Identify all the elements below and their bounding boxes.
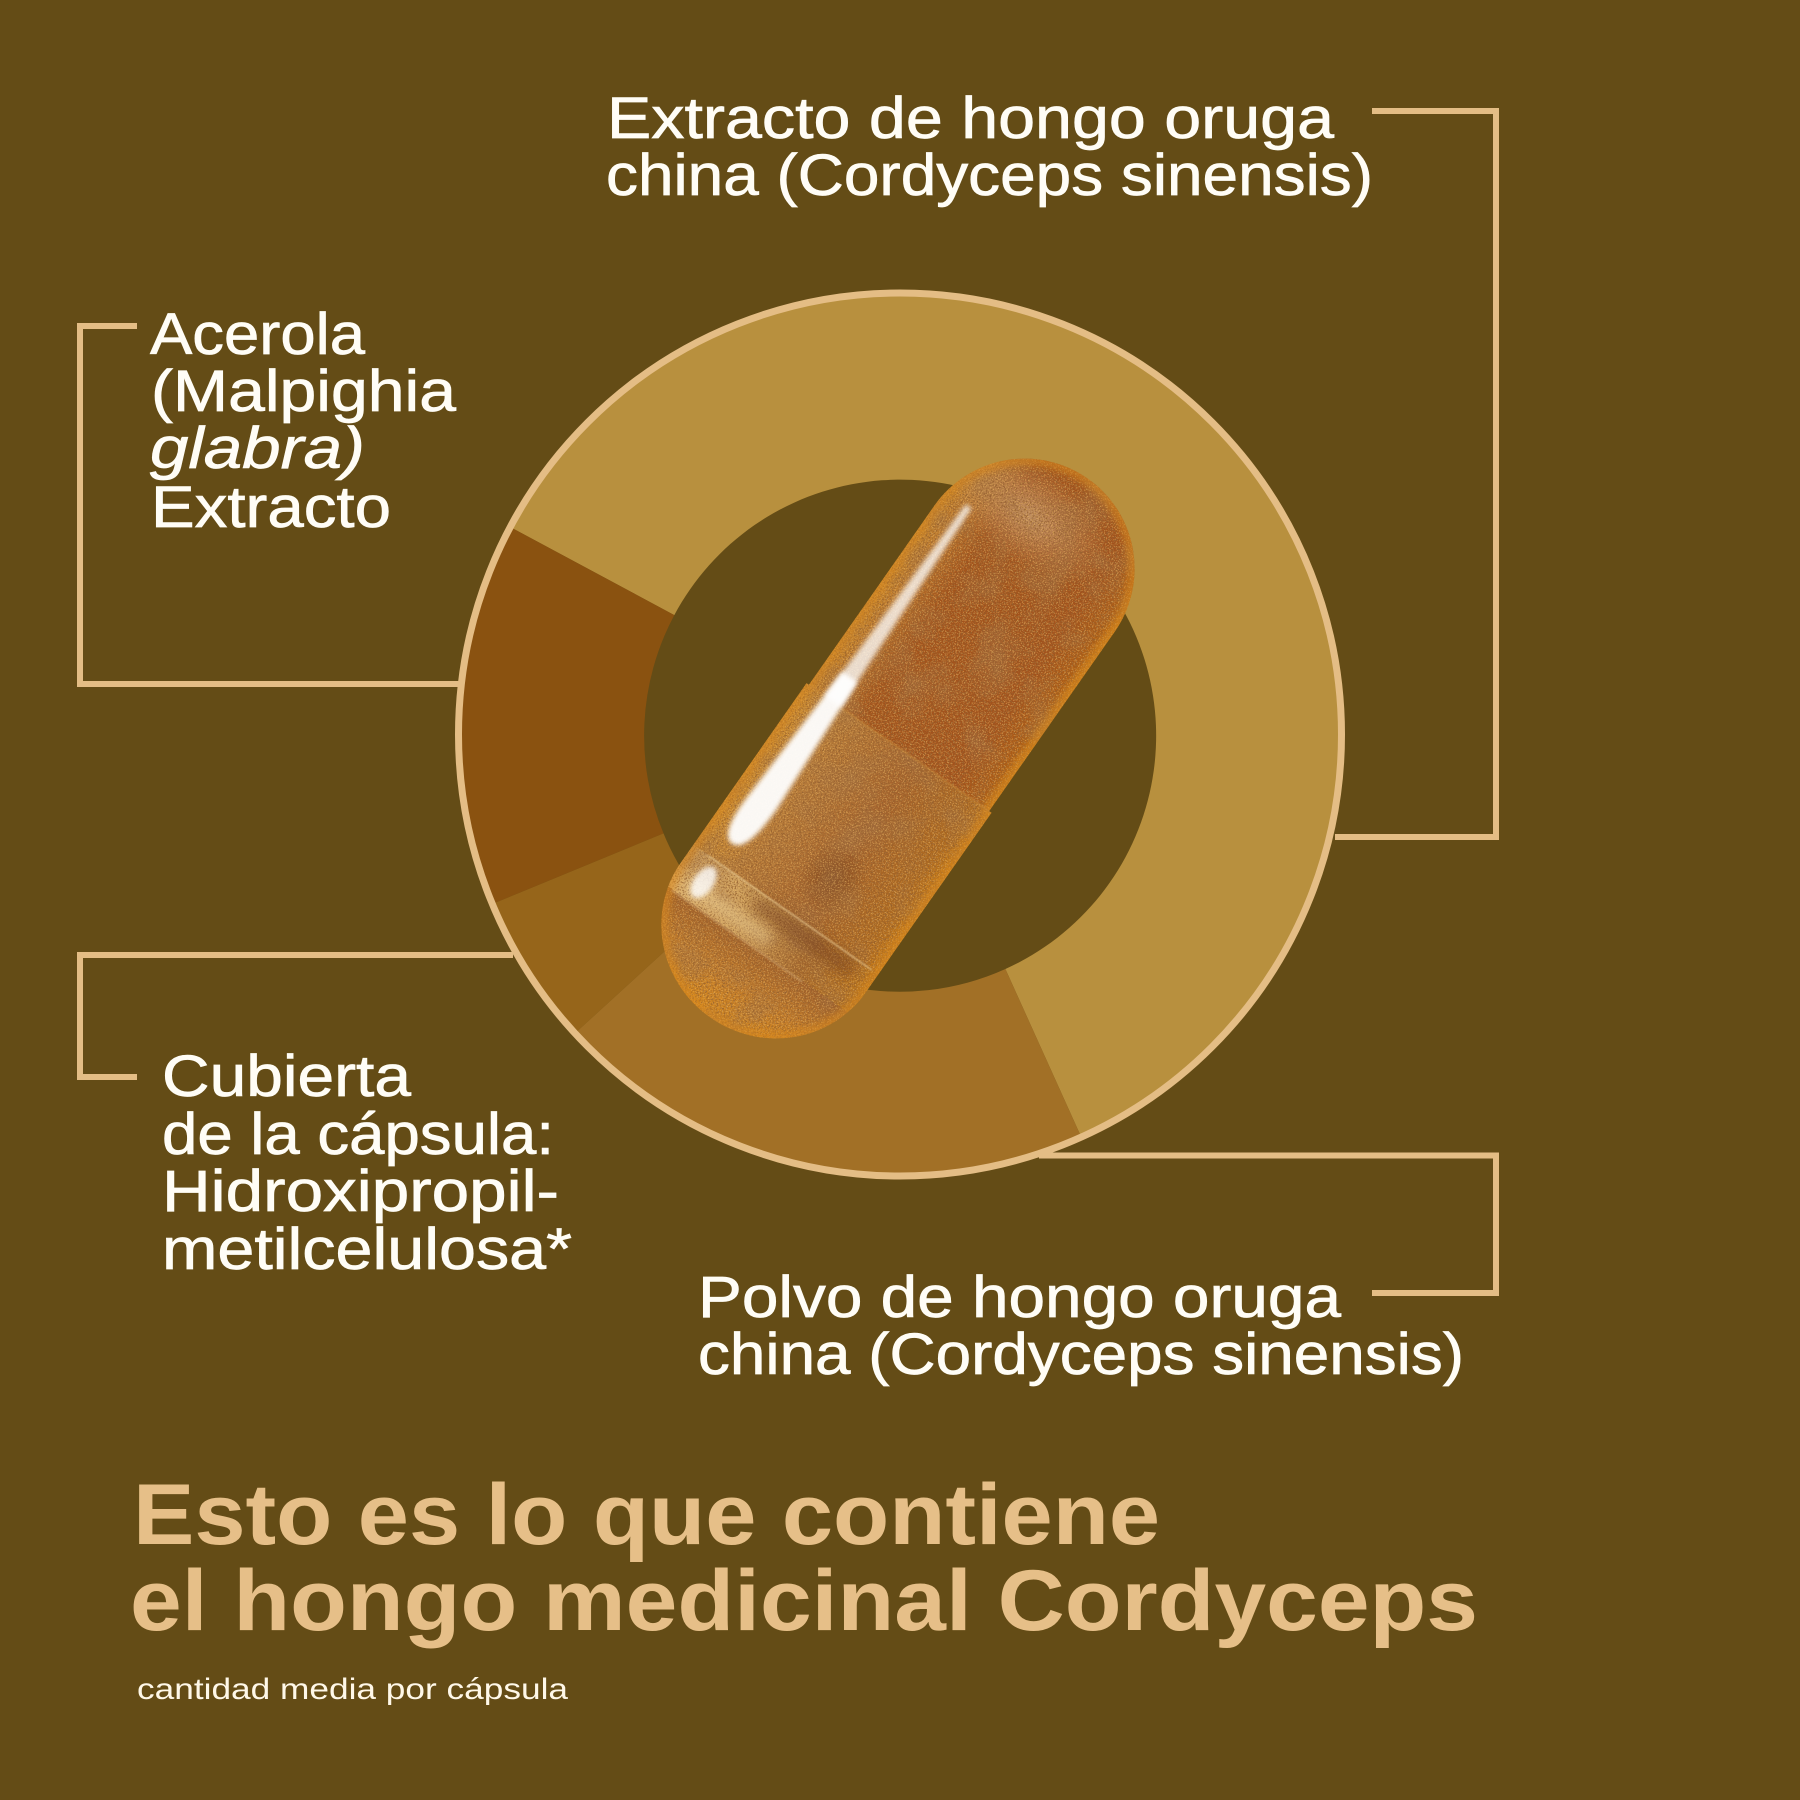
powder dark grain	[662, 461, 1133, 1038]
highlight streak upper	[824, 501, 977, 707]
label: acerola	[150, 302, 457, 540]
powder mottling	[666, 478, 1133, 1032]
capsule illustration	[661, 458, 1135, 1038]
label: polvo de hongo oruga: Polvo de hongo oruga	[698, 1265, 1342, 1330]
capsule clear band	[665, 845, 879, 1015]
label: polvo de hongo oruga	[698, 1265, 1464, 1387]
label: cubierta de la capsula: metilcelulosa*	[162, 1217, 572, 1282]
powder light grain	[661, 458, 1134, 1038]
label: extracto de hongo oruga	[606, 86, 1373, 208]
label: extracto de hongo oruga: china (Cordyceps sinensis)	[606, 143, 1373, 208]
highlight spot	[685, 862, 722, 903]
label: polvo de hongo oruga: china (Cordyceps sinensis)	[698, 1322, 1464, 1387]
dark powder blob	[805, 851, 860, 904]
label: acerola: Acerola	[150, 302, 366, 367]
title: Esto es lo que contiene	[133, 1467, 1160, 1563]
label: acerola: Extracto	[151, 475, 391, 540]
capsule upper glow	[963, 466, 1100, 572]
highlight streak lower	[720, 668, 863, 853]
subtitle: cantidad media por cápsula	[137, 1673, 568, 1706]
title	[130, 1467, 1478, 1649]
segment: acerola	[460, 528, 674, 904]
connector: acerola bracket	[80, 326, 459, 684]
label: cubierta de la capsula: Cubierta	[162, 1044, 412, 1109]
band light patch	[684, 877, 775, 947]
label: acerola: glabra)	[150, 416, 365, 481]
shell edge line	[806, 682, 992, 814]
label: cubierta de la capsula: de la cápsula:	[162, 1102, 554, 1167]
capsule rim	[661, 458, 1134, 1038]
title: el hongo medicinal Cordyceps	[130, 1553, 1478, 1649]
label: acerola: (Malpighia	[151, 359, 457, 424]
donut chart	[458, 293, 1342, 1176]
label: cubierta de la capsula: Hidroxipropil-	[162, 1159, 559, 1224]
label: extracto de hongo oruga: Extracto de hongo oruga	[607, 86, 1335, 151]
connector: capsule shell bracket	[80, 955, 513, 1077]
connector: extract bracket	[1335, 111, 1496, 837]
capsule upper body	[806, 458, 1134, 814]
capsule powder tip	[662, 886, 845, 1038]
segment: polvo de hongo oruga	[576, 909, 1081, 1176]
segment: cubierta de la capsula	[494, 833, 711, 1033]
connector: powder bracket	[1039, 1156, 1496, 1293]
segment: extracto de hongo oruga	[512, 295, 1340, 1136]
shell seam line	[707, 854, 872, 971]
label: cubierta de la capsula	[162, 1044, 572, 1282]
capsule lower shell	[693, 683, 992, 975]
tip seam line	[671, 889, 803, 983]
ring outline	[458, 293, 1342, 1176]
band dark powder shade	[749, 895, 858, 978]
